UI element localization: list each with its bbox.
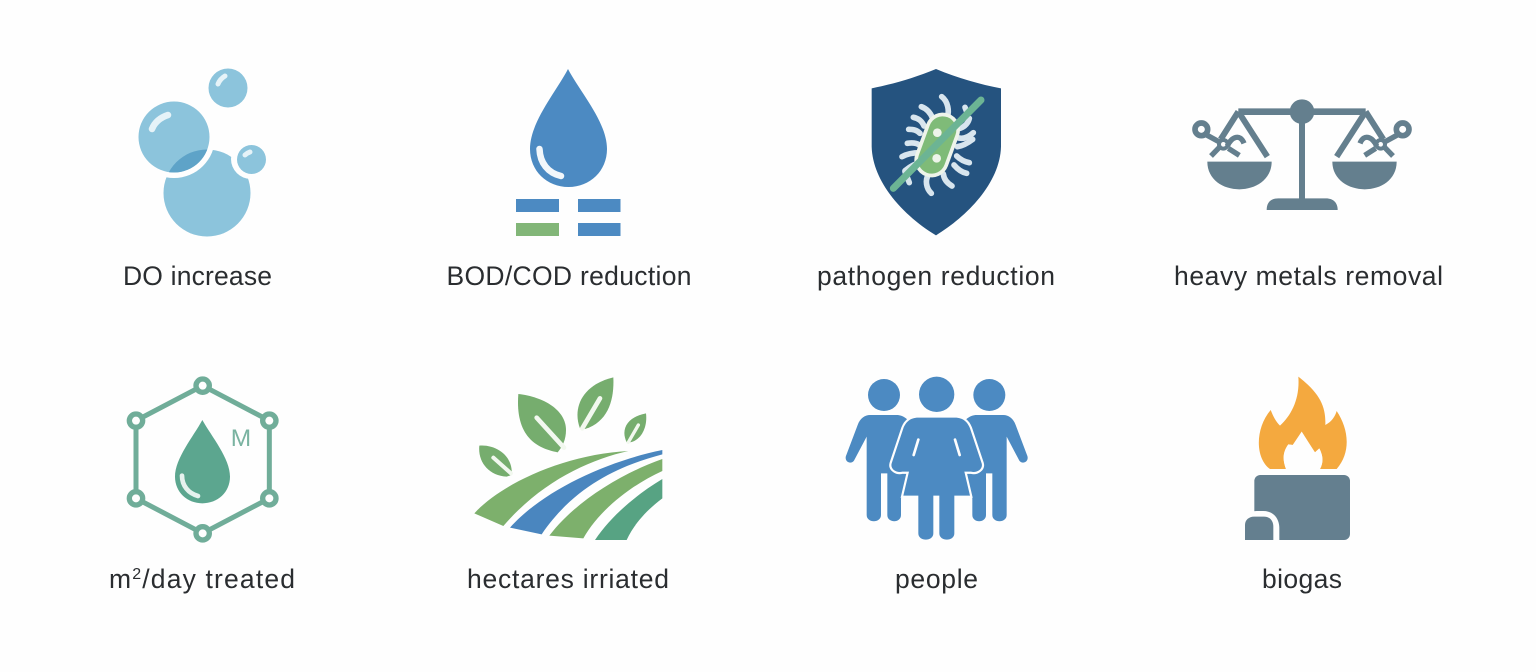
panel: m²/day treated — [109, 379, 295, 594]
icon: shield with crossed pathogen — [872, 69, 1001, 235]
label: BOD/COD reduction: BOD/COD reduction — [446, 261, 692, 291]
panel: heavy metals removal — [1174, 99, 1443, 291]
label: pathogen reduction: pathogen reduction — [817, 261, 1055, 291]
panel: hectares irrigated — [467, 377, 669, 594]
icon: flame over tank — [1241, 377, 1350, 540]
label: m²/day treated: m — [109, 564, 131, 594]
icon: field with leaves — [474, 377, 662, 540]
label: m²/day treated: 2 — [132, 566, 141, 583]
label: people: people — [895, 564, 978, 594]
panel: biogas — [1241, 377, 1350, 594]
label: hectares irrigated: hectares irriated — [467, 564, 669, 594]
label: m²/day treated: /day treated — [142, 564, 295, 594]
panel: DO increase — [123, 68, 272, 291]
panel: people — [846, 377, 1028, 594]
icon: bubbles — [133, 68, 271, 236]
icon: hexagon with water drop — [129, 379, 276, 540]
label: biogas: biogas — [1262, 564, 1342, 594]
panel: BOD/COD reduction — [446, 69, 692, 291]
icon: three people — [846, 377, 1028, 540]
icon letter: M: M — [231, 425, 251, 452]
label: DO increase: DO increase — [123, 261, 272, 291]
icon: balance scale with molecules — [1195, 99, 1409, 210]
right pan — [1332, 112, 1409, 189]
icon: water drop with bars — [516, 69, 620, 236]
panel: pathogen reduction — [817, 69, 1055, 291]
label: heavy metals removal: heavy metals removal — [1174, 261, 1443, 291]
left pan — [1195, 112, 1272, 189]
